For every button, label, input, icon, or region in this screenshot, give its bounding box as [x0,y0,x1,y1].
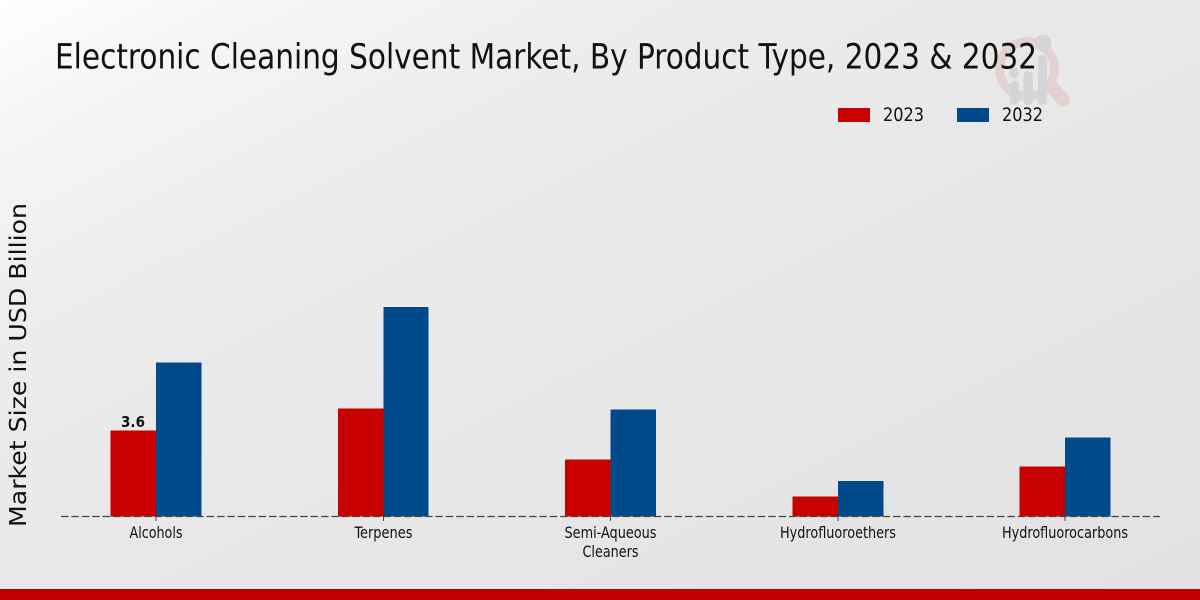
bars: Alcohols [110,362,202,516]
x axis baseline [61,516,1160,518]
footer bar [0,589,1200,600]
bar chart [61,307,1160,521]
x label: Alcohols: Alcohols [130,523,182,542]
legend: 2032 [957,104,1043,126]
x label: Semi-Aqueous Cleaners [564,523,656,561]
x label: Semi-Aqueous Cleaners: Semi-Aqueous [564,523,656,542]
x label: Semi-Aqueous Cleaners: Cleaners [582,542,638,561]
x label: Terpenes: Terpenes [354,523,412,542]
bars: Terpenes [338,307,428,516]
x label: Hydrofluorocarbons: Hydrofluorocarbons [1002,523,1128,542]
x label: Hydrofluoroethers: Hydrofluoroethers [780,523,896,542]
legend: 2023: 2023 [883,104,924,126]
title: Electronic Cleaning Solvent Market, By Product Type, 2023 & 2032 [55,38,1037,78]
y axis label: Market Size in USD Billion [4,203,32,527]
bars: Hydrofluoroethers [792,481,884,516]
legend: 2032: 2032 [1002,104,1043,126]
legend [838,104,1043,126]
legend: 2023 [838,104,924,126]
bars: Hydrofluorocarbons [1020,438,1110,516]
bars: Semi-Aqueous Cleaners [565,410,656,516]
icon: magnifier watermark [1000,34,1063,105]
value label: 3.6: 3.6 [121,413,145,431]
